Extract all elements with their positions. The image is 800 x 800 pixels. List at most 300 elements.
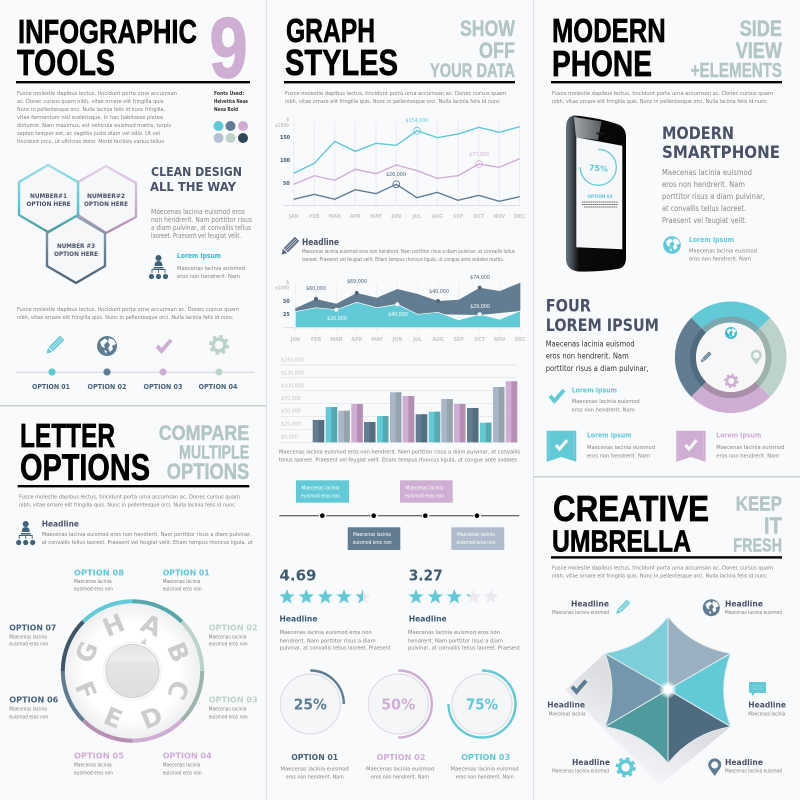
icon: check: [157, 340, 171, 351]
paragraph: clean design: a diam pulvinar, at convallis tellus: [151, 224, 251, 232]
bars: [313, 381, 517, 442]
callout: lorem ipsum: [177, 251, 245, 280]
column dividers: [266, 0, 534, 800]
paragraph: clean design: laoreet. Praesent vel feugiat velit.: [151, 232, 241, 240]
paragraph: porttitor risus a diam pulvinar,: [662, 192, 765, 201]
intro text: nibh, vitae ornare elit fringilla quis. Nunc in pellentesque orci. Nulla lacinia felis id nunc: [19, 503, 235, 509]
subtitle: show off your data: [430, 16, 515, 82]
headline block: Headline: [302, 238, 339, 248]
data labels: [306, 275, 490, 322]
subtitle: keep it fresh: KEEP: [736, 493, 782, 516]
rating: 4.69: Maecenas lacinia euismod eros non: [280, 630, 372, 636]
dark series: [294, 184, 520, 201]
month labels: OCT: [473, 214, 485, 220]
month labels: JUN: [390, 214, 401, 220]
callout: lorem ipsum teal: [572, 386, 640, 414]
paragraph: eros non hendrerit. Nam: [662, 180, 745, 189]
stars: [279, 589, 371, 603]
dial letters: H: [98, 608, 129, 643]
data markers: [393, 127, 482, 188]
rating: 3.27: [408, 567, 520, 652]
callout: lorem ipsum purple: Lorem Ipsum: [716, 431, 761, 440]
option labels: euismod eros non: [163, 770, 202, 776]
rating: 3.27: pulvinar, at convallis tellus laoreet. Praesent: [408, 646, 520, 652]
option labels: OPTION 07: [9, 623, 57, 633]
line chart: [275, 117, 526, 220]
screen text: OPTION 03: [588, 194, 613, 199]
dial letters: C: [161, 676, 195, 704]
axis labels: $50,000: [281, 409, 301, 415]
subtitle: show off your data: OFF: [479, 38, 515, 63]
fonts used note: Fonts Used:: [214, 91, 244, 97]
callout: lorem ipsum teal 2: eros non hendrerit. Nam: [587, 454, 650, 460]
option labels: OPTION 04: [163, 750, 212, 760]
option labels: OPTION 02: [209, 623, 258, 633]
month labels: MAR: [330, 337, 343, 343]
headline block: [302, 238, 515, 263]
progress circle 50%: 50%: [381, 696, 415, 714]
option labels: Maecenas lacinia: [9, 706, 47, 712]
callout: lorem ipsum: [689, 235, 757, 263]
intro text: vitae fermentum nisl scelerisque. In hac habitasse platea: [17, 115, 163, 121]
hexagon 1: [19, 165, 78, 232]
callout: lorem ipsum purple: Maecenas lacinia euismod: [716, 445, 784, 451]
option labels: Maecenas lacinia: [163, 763, 200, 769]
label: bottom right: [725, 757, 782, 774]
heading rule: [16, 81, 250, 83]
box: dark: [348, 527, 400, 550]
dial letters: E: [100, 701, 127, 735]
intro text: ac. Donec cursus quam nibh, vitae ornare elit fringilla quis.: [17, 99, 165, 105]
progress circle 25%: Maecenas lacinia euismod: [281, 766, 349, 772]
text block: nibh, vitae ornare elit fringilla quis. Nunc in pellentesque orci. Nulla lacinia felis id nunc: [17, 315, 233, 321]
month labels: APR: [351, 337, 362, 343]
subtitle: side view elements: [691, 16, 782, 82]
axis labels: $0,000: [281, 435, 298, 441]
rating: 4.69: Headline: [280, 614, 318, 624]
fonts used note: [214, 91, 248, 113]
label: right: [748, 700, 786, 717]
progress circle 25%: eros non hendrerit. Nam: [286, 774, 344, 780]
dial letters: F: [69, 677, 102, 704]
title: letter options: [20, 418, 150, 488]
axis labels: $100,000: [281, 384, 304, 390]
subtitle: side view elements: VIEW: [736, 38, 782, 63]
fonts used note: Helvetica Neue: [214, 99, 248, 105]
option labels: Maecenas lacinia: [209, 706, 246, 712]
paragraph: eros non hendrerit. Nam: [546, 352, 629, 361]
callout: lorem ipsum teal: eros non hendrerit. Nam: [572, 408, 635, 414]
month labels: JUN: [391, 337, 402, 343]
intro text: nibh, vitae ornare elit fringilla quis. Nunc in pellentesque orci. Nulla lacinia felis id nunc: [285, 99, 500, 105]
progress circle 50%: OPTION 02: [376, 752, 426, 762]
donut segments: [682, 309, 779, 406]
heading: modern smartphone: [662, 124, 780, 162]
icon: org chart: [16, 521, 35, 545]
month labels: JAN: [290, 337, 300, 343]
title: infographic tools: [17, 14, 197, 83]
long shadow: [565, 653, 731, 785]
month labels: JUL: [412, 337, 422, 343]
panel: letter options: [9, 418, 258, 776]
axis labels: $130,000: [281, 371, 304, 377]
intro text: [19, 494, 240, 509]
stars: [408, 589, 499, 603]
intro text: Fusce molestie dapibus lectus, tincidunt porta urna accumsan ac. Donec cursus quam: [19, 494, 240, 500]
icon: gear: [617, 759, 634, 776]
hexagon 3: NUMBER #3: [57, 243, 95, 250]
option labels: Maecenas lacinia: [74, 579, 112, 585]
intro text: tincidunt orcu, ut ultricies dolor. Morbi facilisis varius tellus: [17, 139, 164, 145]
progress circle 75%: [448, 670, 519, 780]
icon: pencil: [279, 237, 299, 257]
donut inner band: [693, 320, 768, 395]
data labels: $154,000: [406, 118, 428, 124]
label: top left: Maecenas lacinia euismod: [552, 610, 609, 616]
option labels: OPTION 06: [9, 695, 59, 705]
title: infographic tools: INFOGRAPHIC: [18, 14, 197, 51]
option labels: Maecenas lacinia: [74, 763, 112, 769]
option labels: [9, 568, 258, 776]
label: top left: Headline: [571, 599, 609, 609]
title: infographic tools: TOOLS: [17, 42, 115, 83]
callout: lorem ipsum: Maecenas lacinia euismod: [689, 248, 757, 254]
callout: lorem ipsum teal: Maecenas lacinia euismod: [572, 399, 640, 405]
progress circle 50%: eros non hendrerit. Nam: [371, 774, 429, 780]
subtitle: compare multiple options: OPTIONS: [167, 459, 249, 484]
headline block: Maecenas lacinia euismod eros non hendrerit. Nam porttitor risus a diam pulvinar, at convallis tellus: [302, 249, 515, 255]
label: bottom left: [552, 757, 610, 774]
intro text: Fusce molestie dapibus lectus, tincidunt porta urna accumsan ac. Donec cursus quam: [552, 91, 773, 97]
callout: lorem ipsum teal 2: [587, 431, 655, 460]
icon: gear: [725, 375, 737, 387]
progress circle 50%: [366, 670, 434, 780]
y axis labels: $: [286, 280, 290, 286]
label: top right: Maecenas lacinia euismod: [725, 610, 782, 616]
box: purple: euismod eros non: [405, 494, 444, 500]
hexagon 2: [78, 166, 136, 233]
dial letters: G: [70, 637, 104, 667]
chart caption: tellus laoreet. Praesent vel feugiat velit. Etiam tempus rhoncus ligula, ut congue ante sodales: [279, 458, 517, 464]
panel: creative umbrella: [547, 488, 786, 785]
rating: 3.27: 3.27: [409, 567, 443, 585]
heading: four lorem ipsum: LOREM IPSUM: [546, 316, 659, 335]
umbrella segments: [605, 617, 731, 763]
title: graph styles: [285, 13, 398, 83]
label: right: Headline: [748, 700, 786, 710]
month labels: DEC: [515, 337, 526, 343]
umbrella hub: [659, 681, 677, 699]
purple series: [294, 159, 520, 184]
progress circle 75%: OPTION 03: [461, 752, 510, 762]
phone body: [566, 116, 626, 272]
chart caption: Maecenas lacinia euismod eros non hendrerit. Nam porttitor risus a diam pulvinar, at convallis: [279, 449, 520, 455]
box: purple: Maecenas lacinia: [406, 486, 444, 492]
box: gray blue: euismod eros non: [456, 540, 496, 546]
title: graph styles: GRAPH: [286, 13, 375, 50]
option labels: OPTION 08: [74, 568, 124, 578]
label: left: Headline: [547, 700, 585, 710]
paragraph: clean design: [151, 208, 252, 240]
donut chart: [682, 309, 779, 406]
intro text: [285, 91, 506, 105]
teal area: [295, 302, 520, 328]
axis labels: $160,000: [281, 358, 304, 364]
month labels: DEC: [514, 214, 526, 220]
callout: lorem ipsum teal 2: Maecenas lacinia euismod: [587, 445, 655, 451]
rating: 4.69: pulvinar, at convallis tellus laoreet. Praesent: [280, 646, 391, 652]
subtitle: compare multiple options: [159, 422, 249, 484]
option timeline: OPTION 01: [32, 383, 70, 391]
month labels: SEP: [454, 337, 464, 343]
heading: clean design: CLEAN DESIGN: [151, 165, 242, 179]
month labels: SEP: [453, 214, 464, 220]
title: creative umbrella: CREATIVE: [553, 488, 709, 529]
callout: lorem ipsum: eros non hendrerit. Nam: [177, 274, 240, 280]
panel: graph styles: [275, 13, 526, 780]
box: dark: euismod eros non: [353, 540, 392, 546]
label: left: [547, 700, 586, 717]
headline block: Headline: [42, 519, 79, 529]
label: left: Maecenas lacinia: [549, 711, 586, 717]
intro text: dictumst. Nam maximus, est vehicula euismod mattis, turpis: [17, 123, 171, 129]
option labels: euismod eros non: [163, 586, 202, 592]
data labels: $60,000: [306, 286, 326, 292]
box: teal: [296, 480, 349, 503]
box: teal: Maecenas lacinia: [302, 486, 340, 492]
subtitle: side view elements: SIDE: [740, 16, 782, 41]
chart caption: [279, 449, 520, 464]
rating: 3.27: Headline: [409, 614, 447, 624]
option labels: Maecenas lacinia: [163, 579, 200, 585]
heading: four lorem ipsum: [546, 297, 659, 335]
option labels: OPTION 01: [163, 568, 210, 578]
month labels: APR: [350, 214, 361, 220]
month labels: FEB: [311, 337, 321, 343]
option labels: Maecenas lacinia: [9, 634, 47, 640]
icon: globe: [703, 599, 720, 616]
box: purple: [400, 480, 453, 503]
intro text: sapien tempor est, ac sagittis justo diam vel odio. Ut vel: [17, 131, 160, 137]
month labels: [290, 337, 526, 343]
headline block: [42, 519, 253, 546]
title: creative umbrella: [552, 488, 709, 559]
dial ring segments: [63, 601, 202, 741]
data labels: $40,000: [388, 312, 408, 318]
callout: lorem ipsum: Lorem Ipsum: [689, 235, 734, 244]
title: modern phone: [552, 13, 666, 84]
month labels: JAN: [288, 214, 298, 220]
option labels: OPTION 05: [74, 750, 124, 760]
heading rule: [551, 81, 782, 83]
callout: lorem ipsum purple: eros non hendrerit. Nam: [716, 454, 779, 460]
month labels: NOV: [493, 214, 505, 220]
title: creative umbrella: UMBRELLA: [552, 524, 691, 559]
icon: gear: [210, 336, 228, 354]
heading rule: [284, 81, 515, 83]
y axis labels: 25: [283, 312, 290, 318]
y axis labels: 150: [280, 135, 291, 141]
axis labels: $25,000: [281, 422, 301, 428]
month labels: AUG: [432, 337, 444, 343]
month labels: OCT: [474, 337, 486, 343]
option labels: OPTION 03: [209, 695, 258, 705]
speaker: [596, 132, 605, 135]
intro text: Fusce molestie dapibus lectus, tincidunt porta urna accumsan: [17, 91, 177, 97]
hexagon 2: OPTION HERE: [84, 201, 128, 208]
option labels: euismod eros non: [9, 714, 48, 720]
letter dial: [63, 601, 202, 741]
month labels: NOV: [494, 337, 506, 343]
teal series: [294, 127, 520, 173]
callout: lorem ipsum teal 2: Lorem Ipsum: [587, 431, 632, 440]
heading: modern smartphone: SMARTPHONE: [662, 143, 780, 162]
progress circle 25%: 25%: [294, 696, 327, 714]
y axis labels: [275, 117, 291, 187]
paragraph: Praesent vel feugiat velit.: [662, 216, 747, 225]
subtitle: show off your data: SHOW: [460, 16, 515, 41]
title: graph styles: STYLES: [285, 42, 398, 83]
subtitle: show off your data: YOUR DATA: [430, 60, 515, 82]
dial knob: [104, 642, 162, 700]
heading: four lorem ipsum: FOUR: [546, 297, 591, 316]
intro text: [552, 91, 773, 105]
icon: globe: [97, 336, 117, 356]
icon: pencil: [44, 336, 64, 356]
dial letters: B: [161, 638, 195, 666]
rating: 4.69: hendrerit. Nam porttitor risus a diam: [280, 638, 376, 644]
headline block: laoreet. Praesent vel feugiat velit. Etiam tempus rhoncus ligula, ut congue ante sodales mattis.: [302, 257, 504, 263]
headline block: at convallis tellus laoreet. Praesent vel feugiat velit. Etiam tempus rhoncus ligula, ut: [42, 540, 253, 546]
option timeline: [16, 368, 255, 391]
paragraph: at convallis tellus laoreet.: [662, 204, 746, 213]
month labels: MAY: [370, 214, 382, 220]
text block: [17, 307, 239, 321]
progress circle 75%: eros non hendrerit. Nam: [456, 774, 514, 780]
option labels: euismod eros non: [209, 714, 248, 720]
phone glare: [574, 117, 602, 140]
month labels: AUG: [432, 214, 443, 220]
box: gray blue: Maecenas lacinia: [457, 532, 495, 538]
axis labels: $70,000: [281, 396, 301, 402]
subtitle: keep it fresh: IT: [764, 512, 782, 538]
option timeline: OPTION 03: [144, 383, 183, 391]
icon: purple ribbon: [676, 431, 706, 462]
title: modern phone: PHONE: [552, 43, 652, 84]
progress circle 75%: 75%: [466, 696, 498, 714]
icon: globe: [725, 327, 737, 339]
data labels: $74,000: [470, 275, 490, 281]
number nine: 9: [210, 1, 248, 96]
icon: pencil: [615, 600, 630, 615]
subtitle: keep it fresh: FRESH: [733, 535, 782, 556]
progress circle 50%: Maecenas lacinia euismod: [366, 766, 434, 772]
section dividers: [0, 405, 800, 478]
callout: lorem ipsum: eros non hendrerit. Nam: [689, 257, 751, 263]
option labels: euismod eros non: [74, 770, 113, 776]
intro text: Fusce molestie dapibus lectus, tincidunt porta urna accumsan ac. Donec cursus quam: [285, 91, 506, 97]
option labels: euismod eros non: [209, 642, 248, 648]
label: bottom right: Maecenas lacinia euismod: [725, 768, 782, 774]
data labels: $26,000: [327, 316, 347, 322]
y axis labels: 100: [280, 158, 291, 164]
data labels: $26,000: [386, 172, 406, 178]
heading: modern smartphone: MODERN: [662, 124, 734, 143]
month labels: MAR: [329, 214, 341, 220]
intro text: Nunc in pellentesque orci. Nulla lacinia felis id nunc fringilla,: [17, 107, 165, 113]
axis labels: [281, 358, 304, 441]
screen text: [588, 163, 613, 199]
hexagon diagram: [19, 165, 136, 283]
month labels: FEB: [309, 214, 320, 220]
callout: lorem ipsum: Lorem Ipsum: [177, 251, 221, 260]
paragraph: Maecenas lacinia euismod: [546, 340, 635, 349]
y axis labels: [275, 280, 290, 318]
intro text: [552, 565, 773, 579]
area chart: [275, 275, 526, 343]
screen ring chart: [580, 149, 616, 185]
bar chart: [280, 358, 517, 443]
colour swatches: [214, 121, 248, 143]
heading: clean design: ALL THE WAY: [150, 180, 236, 194]
box: dark: Maecenas lacinia: [353, 532, 391, 538]
headline block: Maecenas lacinia euismod eros non hendrerit. Nam porttitor risus a diam pulvinar,: [42, 532, 252, 538]
icon: org chart: [149, 255, 168, 279]
grid lines: [280, 364, 517, 443]
hexagon 1: NUMBER#1: [30, 193, 67, 200]
callout: lorem ipsum teal: Lorem Ipsum: [572, 386, 617, 395]
month labels: [288, 214, 526, 220]
intro text: [17, 91, 177, 145]
screen text: 75%: [589, 163, 608, 174]
label: top right: Headline: [725, 599, 763, 609]
callout: lorem ipsum: Maecenas lacinia euismod: [177, 266, 245, 272]
month labels: JUL: [412, 214, 421, 220]
month labels: MAY: [371, 337, 383, 343]
rating: 3.27: hendrerit. Nam porttitor risus a diam: [408, 638, 503, 644]
paragraph: clean design: Maecenas lacinia euismod eros: [151, 208, 245, 216]
rating: 4.69: 4.69: [280, 567, 316, 585]
heading rule: [18, 485, 249, 487]
icon: globe: [663, 236, 681, 254]
box: teal: euismod eros non: [301, 494, 340, 500]
timeline axis: [279, 513, 519, 518]
phone screen: [576, 137, 622, 249]
fonts used note: Nexa Bold: [214, 107, 238, 113]
dial letters: D: [137, 701, 167, 735]
option timeline: OPTION 04: [198, 383, 238, 391]
screen lines: [582, 202, 618, 207]
subtitle: compare multiple options: COMPARE: [159, 422, 249, 445]
paragraph: Maecenas lacinia euismod: [662, 168, 752, 177]
progress circle 25%: OPTION 01: [291, 752, 338, 762]
phone illustration: [566, 116, 626, 272]
dial letters: [69, 608, 195, 735]
title: letter options: LETTER: [20, 418, 115, 455]
panel: modern phone: [546, 13, 784, 462]
paragraph: [546, 340, 649, 373]
data markers: [314, 286, 482, 316]
heading rule: [551, 556, 782, 559]
box: gray blue: [451, 527, 504, 550]
timeline chart: [279, 480, 519, 550]
text block: Fusce molestie dapibus lectus, tincidunt porta urna accumsan ac. Donec cursus quam: [17, 307, 239, 313]
option timeline: OPTION 02: [88, 383, 127, 391]
label: right: Maecenas lacinia: [748, 711, 785, 717]
donut centre: [696, 323, 765, 392]
subtitle: compare multiple options: MULTIPLE: [179, 441, 249, 462]
icon: teal ribbon: [547, 431, 576, 462]
